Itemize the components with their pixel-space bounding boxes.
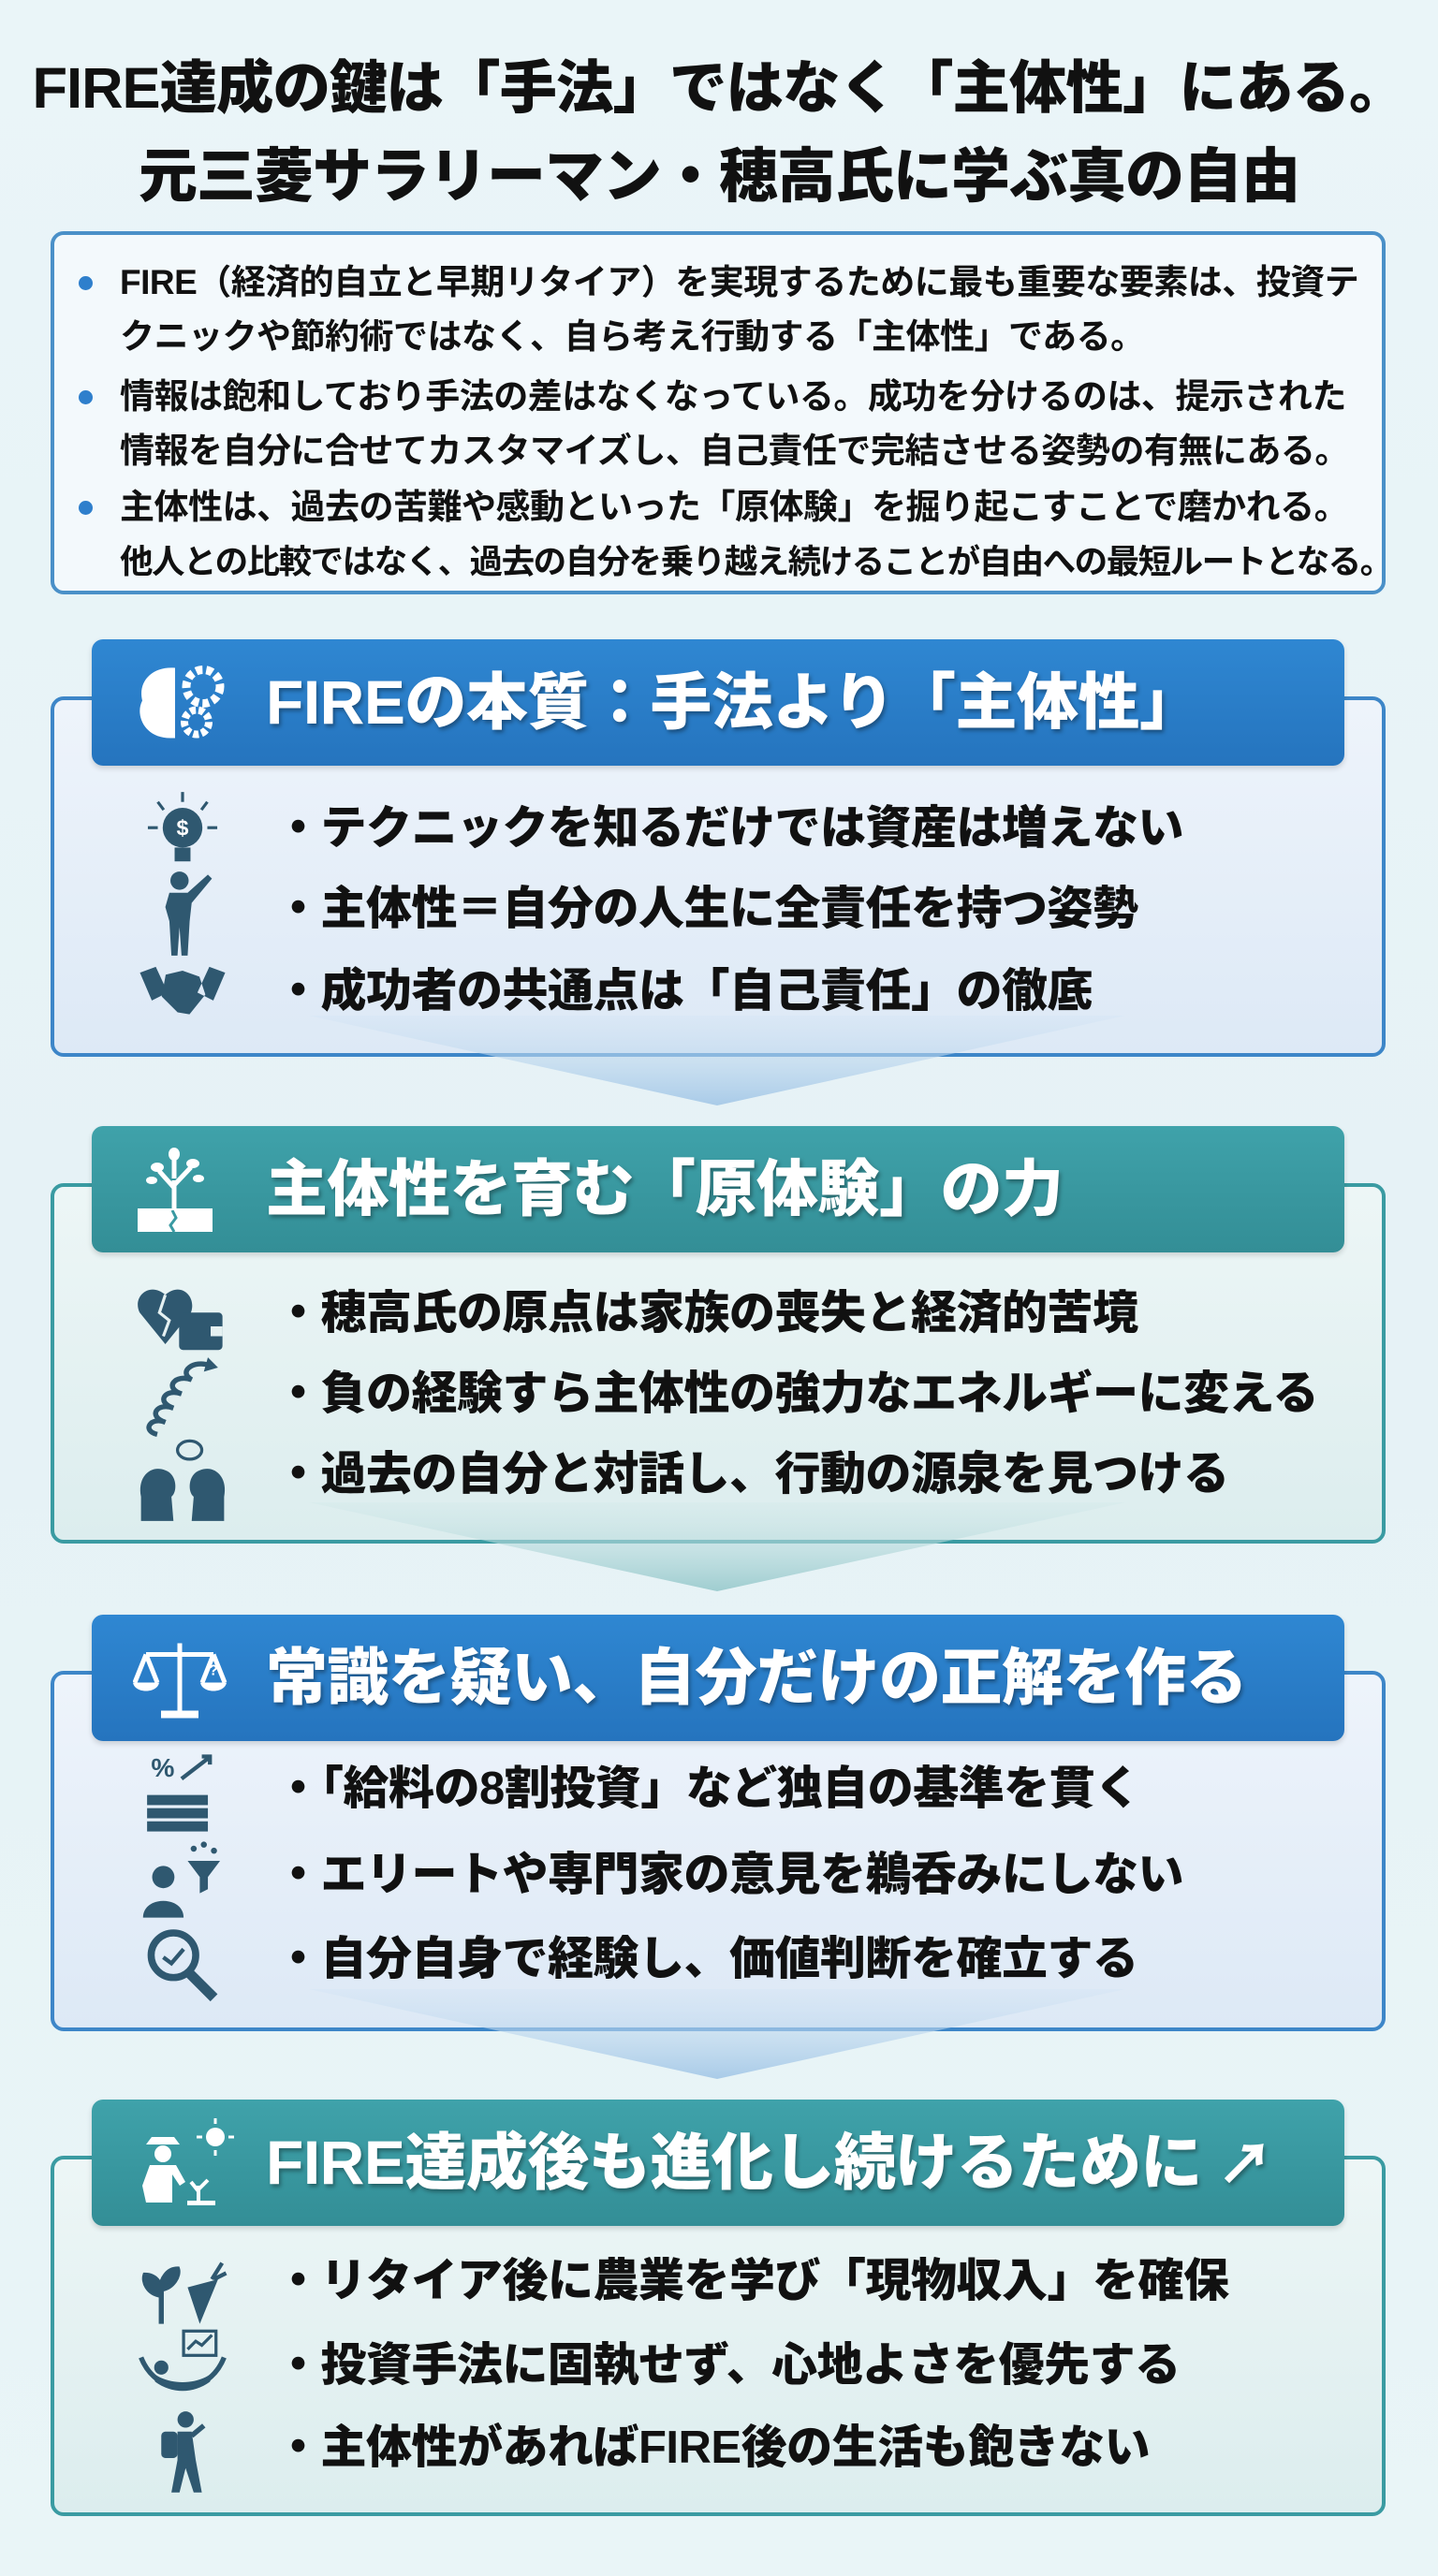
item 3-2 [142, 1841, 1183, 1918]
heading: section 3 [92, 1615, 1344, 1741]
icon: scales [133, 1644, 227, 1719]
panel: section 1 box [51, 696, 1386, 1057]
icon: hammock with chart [139, 2329, 227, 2391]
item 1-3: ・成功者の共通点は「自己責任」の徹底 [275, 966, 1093, 1017]
title [32, 56, 1406, 210]
icon: handshake [140, 966, 225, 1015]
heading: section 3: 常識を疑い、自分だけの正解を作る [266, 1643, 1247, 1712]
item 1-1 [148, 792, 1183, 861]
item 4-3: ・主体性があればFIRE後の生活も飽きない [275, 2422, 1150, 2473]
item 1-2: ・主体性＝自分の人生に全責任を持つ姿勢 [275, 884, 1138, 934]
summary bullet 1: FIRE（経済的自立と早期リタイア）を実現するために最も重要な要素は、投資テ [120, 263, 1358, 301]
panel: section 4 box [51, 2156, 1386, 2516]
panel: summary [51, 231, 1386, 594]
icon: lightbulb dollar [148, 792, 217, 861]
arrow: section 3 to 4 [370, 2001, 1065, 2079]
item 3-3: ・自分自身で経験し、価値判断を確立する [275, 1934, 1138, 1984]
summary bullet 3 [79, 488, 1392, 580]
summary bullet 2 [79, 377, 1349, 470]
icon: person filter [142, 1841, 220, 1918]
item 2-3 [140, 1440, 1229, 1521]
item 2-2: ・負の経験すら主体性の強力なエネルギーに変える [275, 1368, 1318, 1419]
icon: broken heart wallet [138, 1290, 223, 1350]
summary bullet 1 [79, 263, 1358, 356]
icon: person pointing [165, 871, 212, 956]
icon: tree from crack [138, 1148, 213, 1232]
heading: section 1 [92, 639, 1344, 766]
item 2-1: ・穂高氏の原点は家族の喪失と経済的苦境 [275, 1288, 1138, 1339]
item 2-2 [146, 1357, 1318, 1437]
summary bullet 2: 情報を自分に合せてカスタマイズし、自己責任で完結させる姿勢の有無にある。 [120, 432, 1349, 470]
summary bullet 2: 情報は飽和しており手法の差はなくなっている。成功を分けるのは、提示された [120, 377, 1346, 416]
heading: section 1: FIREの本質：手法より「主体性」 [266, 667, 1201, 737]
heading: section 4 [92, 2100, 1344, 2226]
icon: two heads talking [140, 1440, 225, 1521]
heading: section 2: 主体性を育む「原体験」の力 [266, 1154, 1064, 1223]
item 3-3 [148, 1929, 1138, 2001]
icon: money stack percent: % [151, 1753, 174, 1782]
item 4-1: ・リタイア後に農業を学び「現物収入」を確保 [275, 2256, 1229, 2306]
item 1-1: ・テクニックを知るだけでは資産は増えない [275, 803, 1183, 854]
summary bullet 1: クニックや節約術ではなく、自ら考え行動する「主体性」である。 [120, 317, 1145, 356]
item 1-2 [165, 871, 1138, 956]
summary bullet 3: 主体性は、過去の苦難や感動といった「原体験」を掘り起こすことで磨かれる。 [120, 488, 1348, 526]
icon: money stack percent [147, 1753, 212, 1832]
title: 元三菱サラリーマン・穂高氏に学ぶ真の自由 [139, 144, 1299, 210]
icon: scales: ? [209, 1662, 218, 1679]
item 4-3 [161, 2411, 1150, 2493]
panel: section 2 box [51, 1183, 1386, 1544]
item 3-1 [147, 1753, 1140, 1832]
icon: hiker [161, 2411, 206, 2493]
icon: farmer with sun [142, 2118, 234, 2205]
icon: brain gear [139, 666, 225, 738]
icon: magnifier [148, 1929, 217, 2001]
panel: section 3 box [51, 1671, 1386, 2031]
item 3-1: ・「給料の8割投資」など独自の基準を貫く [275, 1764, 1140, 1814]
item 4-2: ・投資手法に固執せず、心地よさを優先する [275, 2340, 1181, 2391]
icon: sprout carrot [142, 2261, 227, 2324]
arrow: section 1 to 2 [370, 1028, 1065, 1105]
summary bullet 3: 他人との比較ではなく、過去の自分を乗り越え続けることが自由への最短ルートとなる。 [120, 543, 1392, 580]
arrow: section 2 to 3 [367, 1515, 1067, 1591]
item 4-1 [142, 2256, 1229, 2324]
heading: section 2 [92, 1126, 1344, 1252]
heading: section 4: FIRE達成後も進化し続けるために ↗ [266, 2128, 1273, 2197]
title: FIRE達成の鍵は「手法」ではなく「主体性」にある。 [32, 56, 1406, 121]
item 2-3: ・過去の自分と対話し、行動の源泉を見つける [275, 1449, 1229, 1500]
icon: spiral arrow [146, 1357, 218, 1437]
item 3-2: ・エリートや専門家の意見を鵜呑みにしない [275, 1850, 1183, 1900]
icon: lightbulb dollar: $ [177, 816, 189, 841]
item 2-1 [138, 1288, 1138, 1350]
